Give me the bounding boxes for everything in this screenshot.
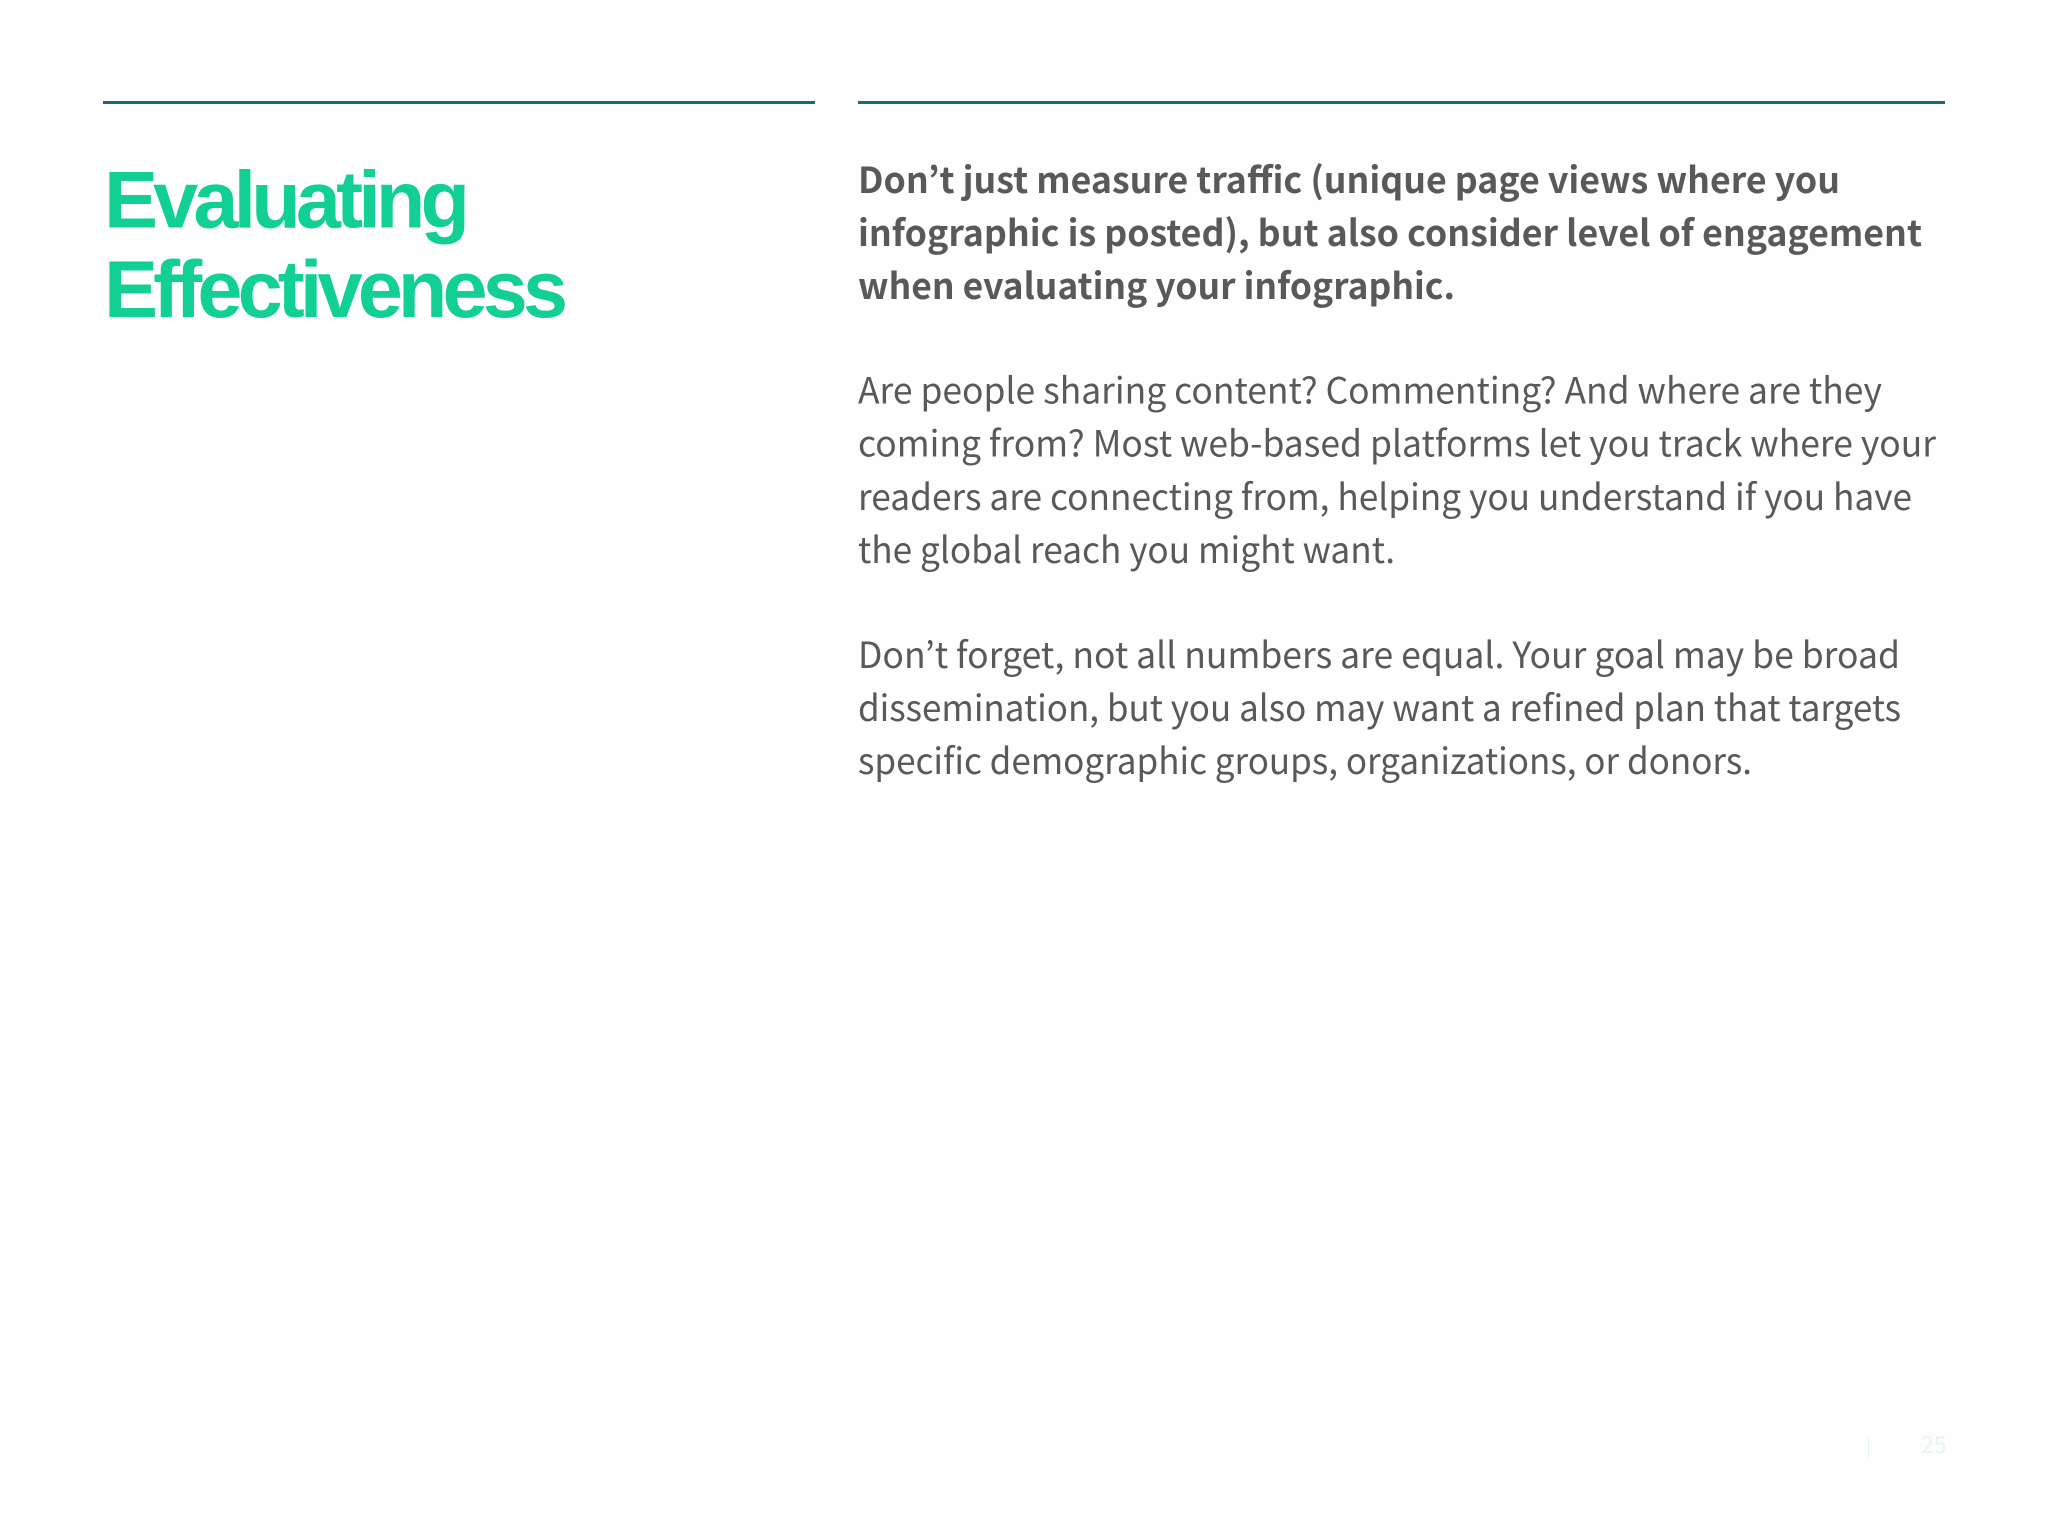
body paragraph: sharing and reach: coming from? Most web-based platforms let you track where your	[858, 416, 1937, 468]
bold intro paragraph	[858, 152, 1922, 310]
page number	[1868, 1426, 1947, 1460]
body paragraph: sharing and reach: readers are connecting from, helping you understand if you have	[858, 469, 1912, 521]
body paragraph: sharing and reach	[858, 362, 1937, 574]
bold intro paragraph: infographic is posted), but also consider level of engagement	[858, 205, 1922, 257]
body paragraph: sharing and reach: Are people sharing content? Commenting? And where are they	[858, 362, 1882, 414]
page number: 25	[1921, 1426, 1947, 1460]
title	[104, 156, 568, 335]
right header rule	[858, 101, 1945, 104]
title: Effectiveness	[104, 245, 568, 335]
bold intro paragraph: when evaluating your infographic.	[858, 258, 1455, 310]
body paragraph: numbers not equal: dissemination, but you also may want a refined plan that targets	[858, 680, 1901, 732]
left header rule	[103, 101, 815, 104]
body paragraph: numbers not equal	[858, 627, 1901, 785]
bold intro paragraph: Don’t just measure traffic (unique page views where you	[858, 152, 1840, 204]
body paragraph: numbers not equal: Don’t forget, not all numbers are equal. Your goal may be broad	[858, 627, 1900, 679]
body paragraph: numbers not equal: specific demographic groups, organizations, or donors.	[858, 733, 1752, 785]
title: Evaluating	[104, 156, 470, 246]
body paragraph: sharing and reach: the global reach you might want.	[858, 522, 1395, 574]
